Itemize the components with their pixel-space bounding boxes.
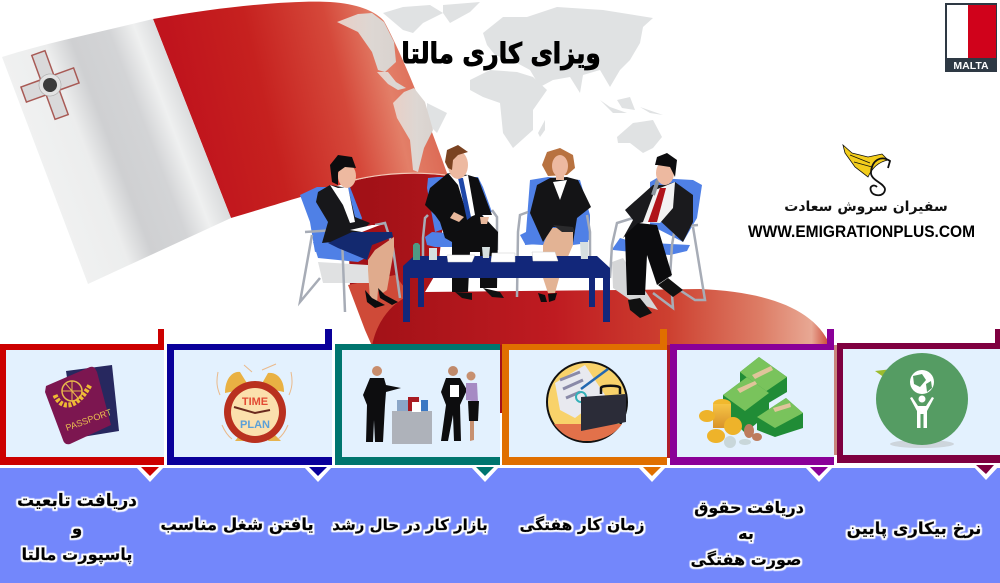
pointer	[972, 465, 1000, 480]
pointer	[805, 467, 833, 482]
pointer	[471, 467, 499, 482]
label: weekly working time: زمان کار هفتگی	[519, 515, 645, 534]
george cross	[12, 43, 88, 127]
icon: money and coins	[699, 357, 803, 448]
floor shadow	[612, 258, 658, 310]
icon: passports	[45, 365, 119, 444]
panel labels	[17, 491, 981, 569]
panel: weekly salary	[670, 329, 834, 482]
label: citizenship and passport	[17, 491, 137, 565]
icon: alarm clock: PLAN	[240, 419, 270, 431]
icon: person holding globe	[875, 353, 968, 448]
pointer	[304, 467, 332, 482]
person 4: man with microphone	[610, 153, 705, 318]
panel: citizenship and passport	[0, 329, 164, 482]
title: ویزای کاری مالتا	[401, 38, 601, 70]
company logo	[748, 145, 975, 241]
label: citizenship and passport: دریافت تابعیت	[17, 491, 137, 511]
badge label: MALTA	[953, 60, 989, 72]
pointer	[638, 467, 666, 482]
icon: alarm clock	[217, 364, 292, 443]
light fold edge	[350, 173, 445, 181]
band gaps	[500, 345, 837, 458]
world map	[383, 2, 663, 153]
panel: low unemployment	[837, 329, 1000, 480]
label: weekly salary: دریافت حقوق	[694, 498, 804, 517]
icon: briefcase circle	[547, 362, 627, 442]
label: growing job market: بازار کار در حال رشد	[332, 516, 488, 534]
americas on flag	[337, 13, 433, 172]
panel: weekly working time	[502, 329, 667, 482]
clock words: TIME	[242, 396, 268, 408]
table with papers	[403, 242, 610, 322]
website url: WWW.EMIGRATIONPLUS.COM	[748, 222, 975, 241]
person 2: man with blue tie	[423, 145, 504, 300]
label: citizenship and passport: و	[71, 519, 82, 539]
panel: finding a suitable job	[167, 329, 332, 482]
label: low unemployment: نرخ بیکاری پایین	[847, 518, 981, 539]
icon: passports: PASSPORT	[64, 407, 113, 433]
conference people	[300, 145, 705, 322]
icon: winged bird	[843, 145, 890, 195]
bottom blue band	[0, 468, 1000, 583]
water bottles	[413, 243, 420, 260]
pointer	[136, 467, 164, 482]
white side of flag	[2, 19, 231, 284]
label: citizenship and passport: پاسپورت مالتا	[22, 545, 132, 565]
malta flag badge	[945, 3, 997, 72]
person 1: woman with notebook	[300, 155, 400, 312]
logo persian name: سفیران سروش سعادت	[784, 199, 948, 215]
label: weekly salary	[691, 498, 804, 569]
red side of flag	[153, 2, 448, 218]
flag fold highlight	[348, 275, 410, 346]
label: weekly salary: به	[738, 524, 754, 543]
person 3: woman with auburn hair	[517, 148, 591, 302]
icon: business people at desk	[363, 366, 479, 444]
label: weekly salary: صورت هفتگی	[691, 550, 801, 569]
lower flag fold	[347, 174, 830, 345]
malta waving flag	[2, 2, 830, 346]
label: finding a job: یافتن شغل مناسب	[160, 515, 314, 535]
panel: growing job market	[335, 344, 500, 482]
